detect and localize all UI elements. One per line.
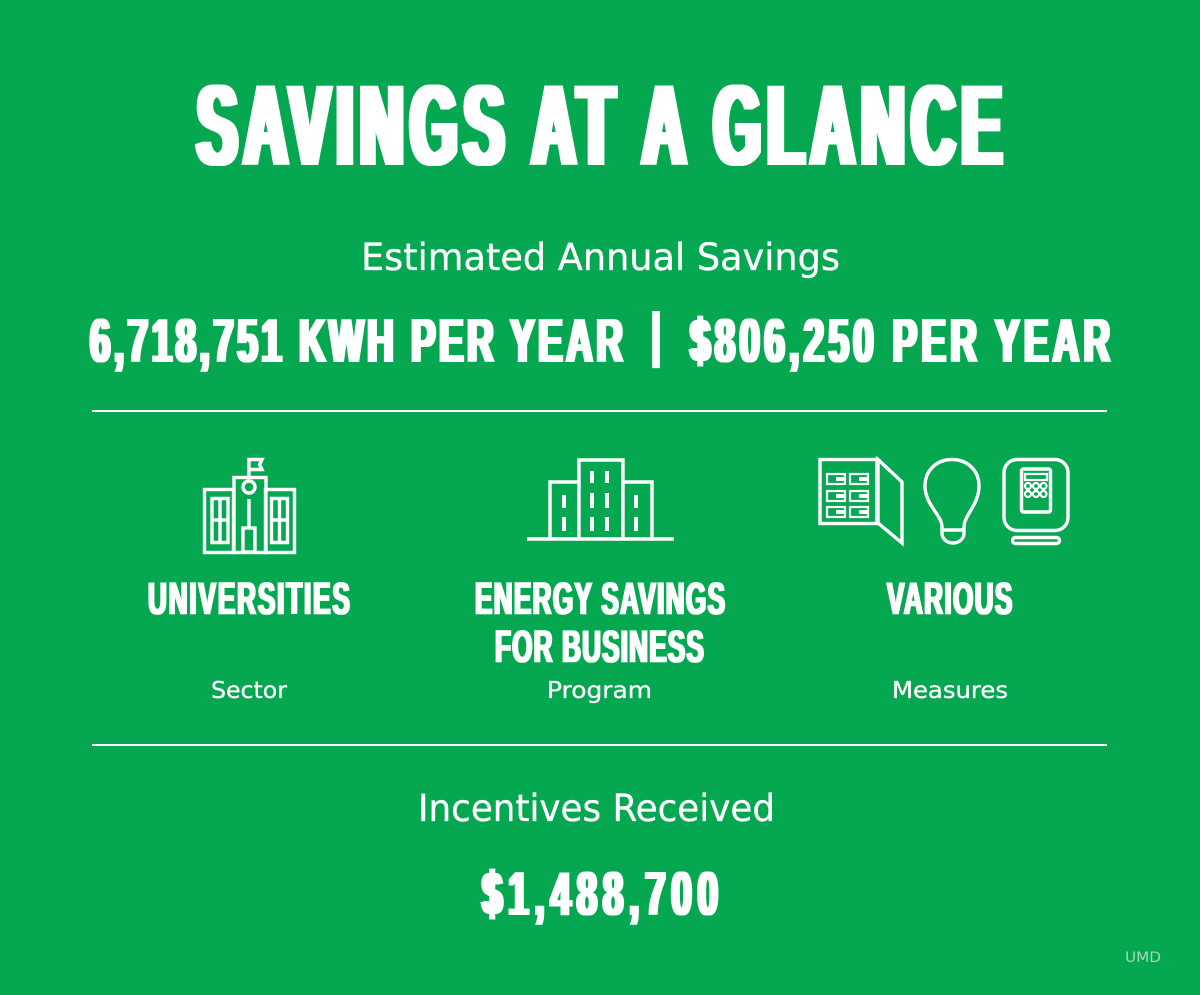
incentives label: Incentives Received (418, 787, 775, 830)
separator bar: | (648, 301, 664, 369)
icon: university building (204, 460, 294, 552)
program value: ENERGY SAVINGS (475, 574, 725, 624)
section: estimated annual savings (90, 236, 1110, 375)
measures label: Measures (892, 678, 1008, 704)
savings label: Estimated Annual Savings (361, 236, 840, 279)
column: program (475, 460, 725, 704)
kWh figure: 6,718,751 KWH PER YEAR (90, 306, 623, 375)
section: incentives (418, 787, 775, 928)
program value second line: FOR BUSINESS (495, 622, 704, 672)
source tag: UMD (1125, 950, 1161, 966)
icon: electrical panel (820, 460, 902, 543)
savings figures (90, 301, 1110, 375)
title: SAVINGS AT A GLANCE (197, 62, 1002, 190)
column: sector (148, 460, 350, 704)
icon: light bulb (925, 460, 979, 543)
column: measures (820, 460, 1068, 704)
dollar figure: $806,250 PER YEAR (690, 306, 1110, 375)
sector label: Sector (211, 678, 288, 704)
icon: thermostat meter (1004, 460, 1068, 544)
incentives amount: $1,488,700 (482, 859, 718, 928)
icon: office buildings (527, 460, 674, 539)
measures value: VARIOUS (887, 574, 1012, 624)
sector value: UNIVERSITIES (148, 574, 350, 624)
program label: Program (547, 678, 652, 704)
